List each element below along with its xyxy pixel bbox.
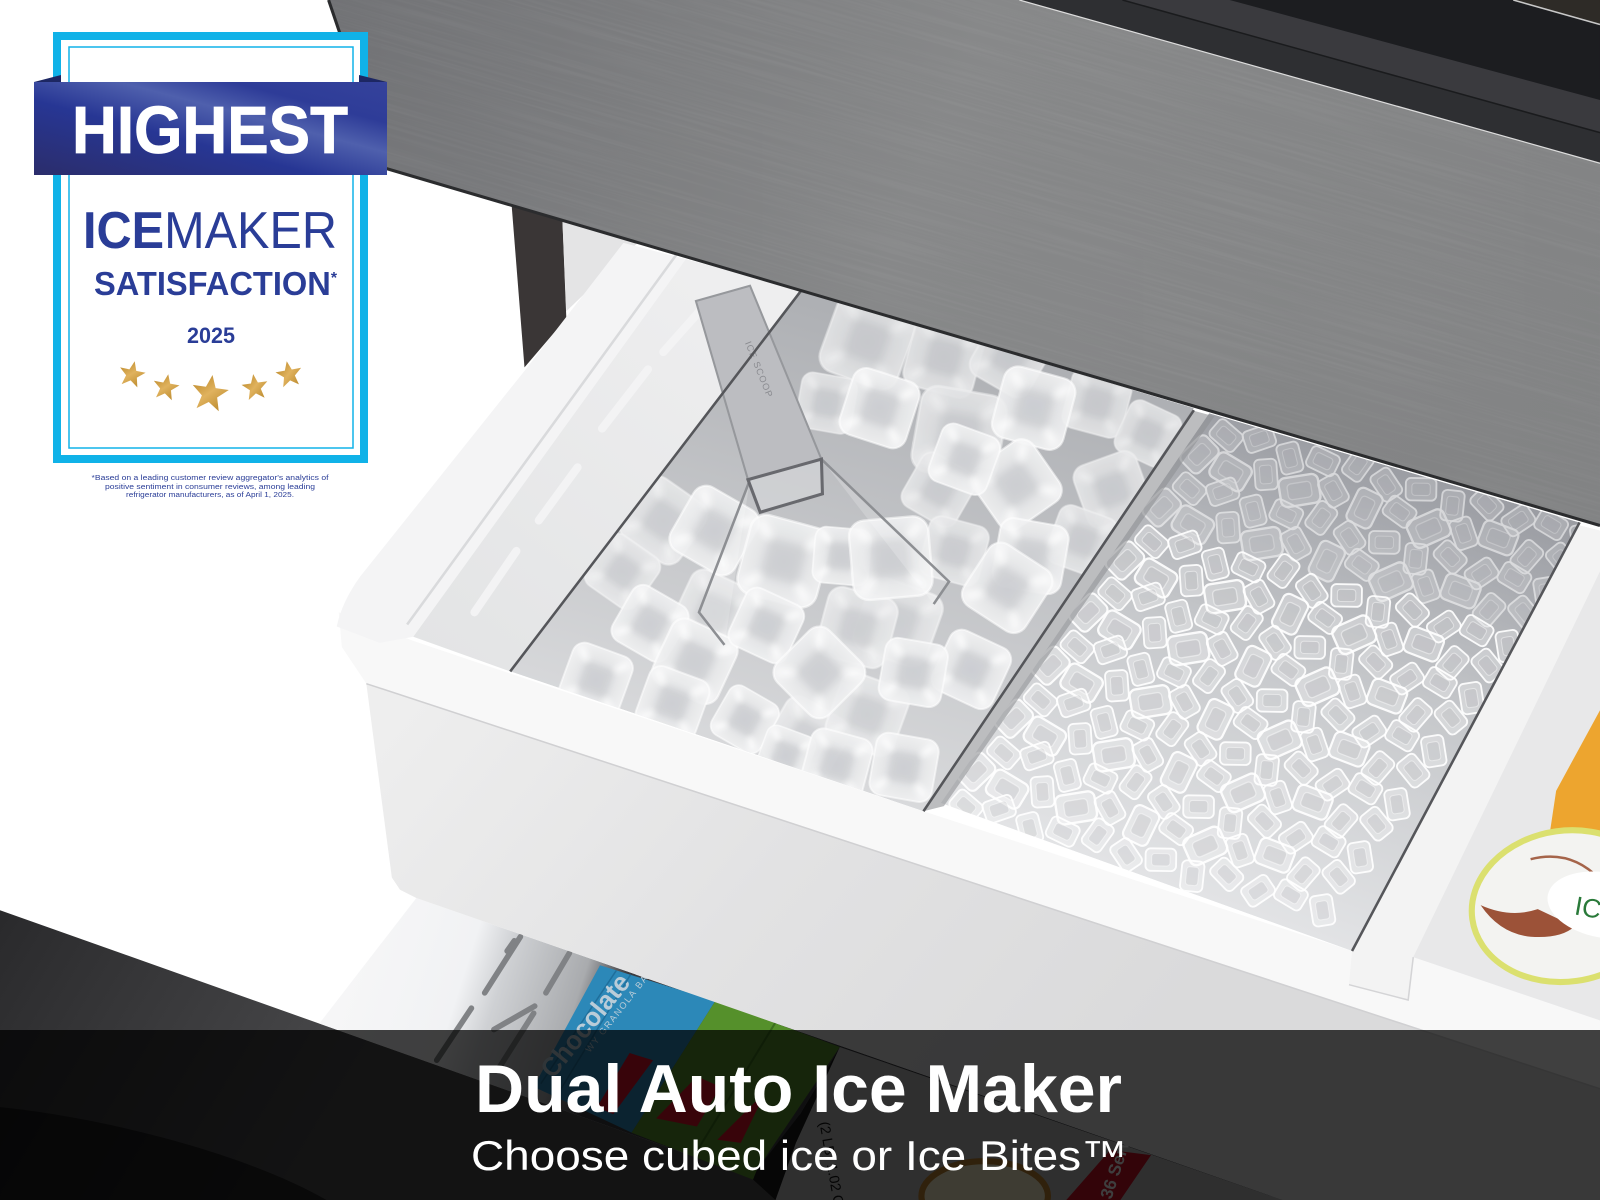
satisfaction heading: *	[331, 270, 338, 287]
back layer of ice cubes	[584, 302, 1182, 756]
lower drawer with products	[319, 898, 1283, 1200]
drawer front rim	[339, 526, 1600, 1089]
ice bites compartment	[941, 405, 1600, 951]
ice scoop: ICE SCOOP	[743, 340, 775, 399]
caption subtitle: Choose cubed ice or Ice Bites™	[471, 1132, 1127, 1179]
right compartment with ice cream tub	[1352, 526, 1600, 1031]
ribbon	[34, 75, 387, 175]
badge frame	[57, 36, 364, 459]
footnote: positive sentiment in consumer reviews, among leading	[105, 482, 315, 491]
caption band	[0, 1030, 1600, 1200]
satisfaction heading: SATISFACTION	[94, 265, 334, 302]
year: 2025	[187, 323, 235, 348]
upper ice bites	[1142, 418, 1577, 628]
dark control panel strips	[1019, 0, 1600, 163]
front layer of ice cubes	[555, 363, 1079, 804]
ribbon: HIGHEST	[72, 93, 348, 168]
footnote	[92, 473, 329, 499]
lower drawer with products: Chocolate	[534, 968, 636, 1083]
drawer side rim	[337, 243, 686, 643]
lower drawer with products: 36 Servings	[1096, 1103, 1145, 1200]
lower ice bites	[942, 511, 1532, 935]
award badge	[34, 36, 387, 499]
caption title: Dual Auto Ice Maker	[475, 1051, 1122, 1127]
icemaker heading: ICEMAKER	[83, 202, 337, 260]
rating stars	[117, 359, 304, 412]
fridge body post	[511, 200, 638, 367]
footnote: refrigerator manufacturers, as of April 1, 2025.	[126, 490, 294, 499]
footnote: *Based on a leading customer review aggregator's analytics of	[92, 473, 329, 482]
drawer inner wall	[407, 253, 806, 671]
brushed steel door panel	[327, 0, 1600, 527]
cubed ice compartment	[510, 290, 1194, 811]
bin divider	[510, 291, 1580, 951]
dark floor panel	[0, 910, 816, 1200]
drawer front face	[366, 684, 1600, 1200]
lower drawer with products: WY GRANOLA BAR	[583, 966, 656, 1054]
ice scoop	[696, 286, 949, 645]
